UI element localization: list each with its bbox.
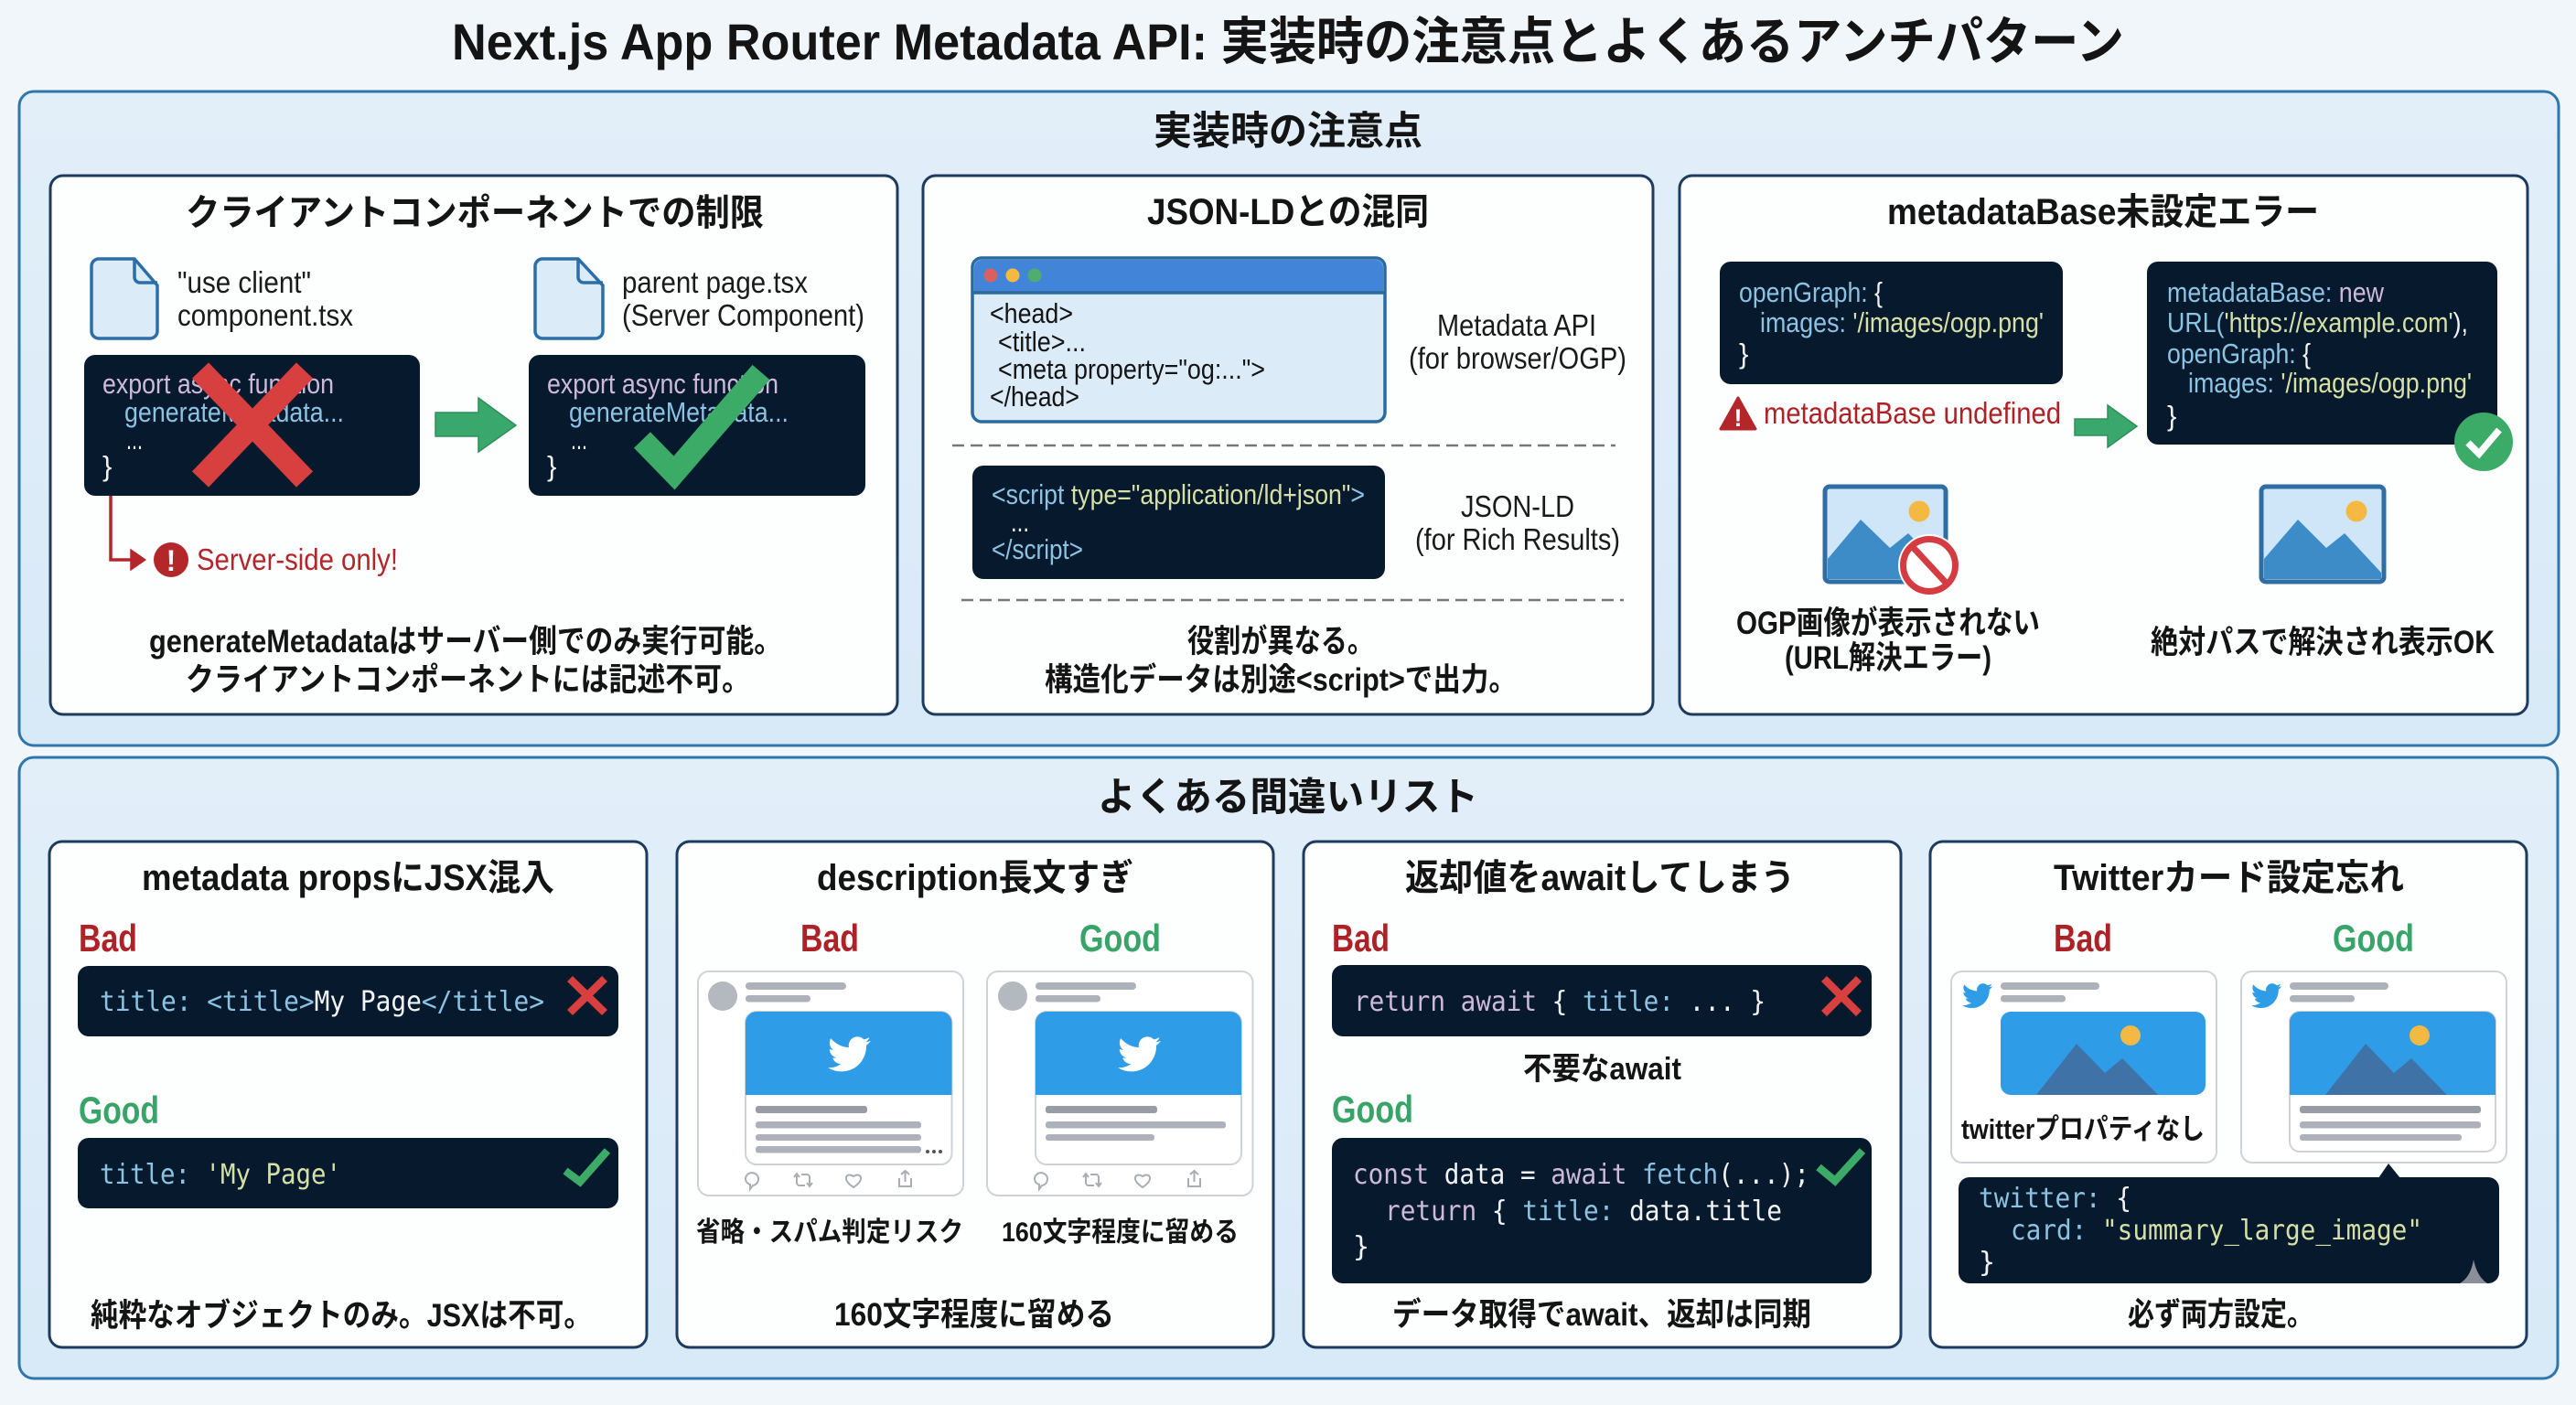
icon: warning: ! — [1734, 404, 1742, 432]
heading: description長文すぎ — [817, 858, 1133, 898]
title: Next.js App Router Metadata API: 実装時の注意点とよくあるアンチパターン — [452, 13, 2124, 70]
code block: with metadataBase — [2147, 262, 2497, 445]
code block: without metadataBase: openGraph: { — [1739, 276, 1883, 308]
label: Good: Good — [2333, 917, 2414, 960]
code block: server: generateMetadata... — [569, 396, 789, 428]
heading: Twitterカード設定忘れ — [2054, 858, 2404, 898]
icon: red cross — [570, 979, 605, 1013]
code block: client: export async function — [102, 368, 334, 400]
icon: broken OGP image — [1825, 487, 1960, 596]
code block: good: return { title: data.title — [1385, 1196, 1782, 1228]
label: Bad: Bad — [800, 917, 859, 960]
panel: 返却値をawaitしてしまう — [1304, 842, 1901, 1347]
file label: use client — [177, 265, 353, 332]
caption: success: 絶対パスで解決され表示OK — [2151, 625, 2495, 660]
file label: parent page — [622, 265, 864, 332]
code block: with metadataBase: openGraph: { — [2167, 338, 2311, 370]
code block: good: const data = await fetch(...); — [1353, 1159, 1809, 1191]
arrow: server-side connector — [111, 496, 144, 568]
panel: クライアントコンポーネントでの制限 — [50, 176, 897, 714]
code block: server — [529, 355, 865, 496]
icon: green check — [642, 372, 761, 473]
label: Bad: Bad — [1332, 917, 1390, 960]
code block: with metadataBase: metadataBase: new — [2167, 276, 2385, 308]
heading: metadataBase未設定エラー — [1887, 192, 2319, 232]
code block: JSON-LD script — [972, 466, 1385, 579]
code block: with metadataBase: images: '/images/ogp.png' — [2188, 367, 2472, 399]
panel: metadata propsにJSX混入 — [49, 842, 647, 1347]
caption: bad: 省略・スパム判定リスク — [696, 1217, 963, 1248]
code block: good — [1332, 1138, 1872, 1283]
code block: twitter config: card: "summary_large_image" — [2011, 1215, 2422, 1247]
icon: red cross — [200, 370, 305, 479]
panel: JSON-LDとの混同 — [923, 176, 1653, 714]
code block: client: ... — [126, 424, 143, 456]
label: Bad: Bad — [2054, 917, 2112, 960]
tweet mockup: truncated — [698, 971, 963, 1196]
label: JSON-LD — [1415, 489, 1620, 556]
panel: Twitterカード設定忘れ — [1930, 842, 2527, 1347]
browser window: </head> — [990, 381, 1079, 413]
code block: client: generateMetadata... — [124, 396, 344, 428]
label: Bad: Bad — [79, 917, 137, 960]
code block: bad — [78, 966, 618, 1036]
heading: metadata propsにJSX混入 — [142, 858, 554, 898]
label: Good: Good — [1079, 917, 1161, 960]
icon: green check — [565, 1151, 607, 1182]
icon: red cross — [1824, 979, 1859, 1014]
note text: 必ず両方設定。 — [2128, 1297, 2313, 1333]
label: Metadata API: (for browser/OGP) — [1409, 341, 1626, 375]
browser window: <title>... — [998, 326, 1086, 358]
code block: bad: title: <title>My Page</title> — [100, 986, 544, 1018]
icon: server file — [535, 259, 603, 338]
code block: client — [84, 355, 420, 496]
twitter card mockup: complete — [2241, 971, 2506, 1163]
note text — [149, 624, 782, 698]
browser window — [972, 258, 1385, 422]
note text: 構造化データは別途<script>で出力。 — [1045, 661, 1517, 698]
code block: twitter config: } — [1979, 1247, 1995, 1279]
icon: exclamation: ! — [166, 544, 176, 577]
callout: unnecessary await: 不要なawait — [1523, 1052, 1681, 1087]
browser window: <meta property="og:..."> — [998, 353, 1265, 385]
twitter card mockup: missing property — [1951, 971, 2216, 1163]
code block: bad: return await { title: ... } — [1354, 986, 1766, 1018]
browser window: <head> — [990, 297, 1073, 329]
code block: with metadataBase: URL('https://example.com'), — [2167, 306, 2468, 338]
panel: よくある間違いリスト section — [19, 757, 2558, 1378]
code block: bad — [1332, 965, 1872, 1036]
panel: metadataBase未設定エラー — [1680, 176, 2528, 714]
file label: use client: "use client" — [177, 265, 311, 299]
panel: 実装時の注意点 section — [19, 91, 2559, 745]
file label: parent page: (Server Component) — [622, 298, 864, 332]
note text: 純粋なオブジェクトのみ。JSXは不可。 — [91, 1297, 592, 1334]
heading: JSON-LDとの混同 — [1147, 192, 1429, 232]
label: JSON-LD: (for Rich Results) — [1415, 522, 1620, 556]
code block: twitter config — [1959, 1164, 2499, 1283]
code block: JSON-LD script: </script> — [992, 533, 1083, 565]
code block: without metadataBase: } — [1739, 338, 1748, 370]
callout: server-side only: Server-side only! — [197, 542, 398, 576]
code block: good: } — [1353, 1231, 1369, 1263]
heading: よくある間違いリスト: よくある間違いリスト — [1098, 776, 1478, 820]
note text: クライアントコンポーネントには記述不可。 — [186, 662, 750, 698]
error label: metadataBase undefined — [1764, 396, 2061, 430]
note text: generateMetadataはサーバー側でのみ実行可能。 — [149, 624, 782, 660]
label: Metadata API — [1409, 308, 1626, 375]
heading: 返却値をawaitしてしまう — [1405, 858, 1795, 898]
tweet mockup: concise — [987, 971, 1253, 1196]
arrow: client to server — [435, 398, 516, 452]
caption: good: 160文字程度に留める — [1002, 1217, 1239, 1248]
caption: failure: OGP画像が表示されない — [1736, 606, 2040, 641]
code block: JSON-LD script: <script type="application/ld+json"> — [992, 478, 1365, 510]
label: Good: Good — [1332, 1088, 1413, 1131]
code block: good: title: 'My Page' — [100, 1159, 341, 1191]
heading: 実装時の注意点: 実装時の注意点 — [1154, 110, 1422, 154]
icon: warning — [1721, 398, 1755, 432]
note text: 160文字程度に留める — [834, 1297, 1114, 1333]
caption: failure: (URL解決エラー) — [1785, 640, 1991, 676]
code block: JSON-LD script: ... — [1011, 506, 1029, 538]
code block: good — [78, 1138, 618, 1208]
file label: parent page: parent page.tsx — [622, 265, 808, 299]
icon: success badge — [2454, 413, 2513, 471]
icon: green check — [1819, 1151, 1862, 1181]
note text: データ取得でawait、返却は同期 — [1392, 1296, 1811, 1333]
code block: server: ... — [571, 424, 587, 456]
code block: without metadataBase: images: '/images/ogp.png' — [1760, 306, 2044, 338]
arrow: fix — [2075, 405, 2137, 447]
caption: failure — [1736, 606, 2040, 676]
code block: without metadataBase — [1720, 262, 2063, 384]
code block: client: } — [102, 450, 112, 482]
code block: with metadataBase: } — [2167, 400, 2176, 432]
note text — [1045, 624, 1517, 698]
file label: use client: component.tsx — [177, 298, 353, 332]
icon: resolved OGP image — [2261, 487, 2384, 582]
code block: twitter config: twitter: { — [1979, 1183, 2131, 1215]
code block: server: export async function — [547, 368, 778, 400]
note text: 役割が異なる。 — [1187, 624, 1374, 660]
panel: description長文すぎ — [677, 842, 1273, 1347]
icon: exclamation — [154, 542, 188, 577]
icon: client file — [91, 259, 157, 338]
code block: server: } — [547, 450, 556, 482]
twitter card mockup: missing property: twitterプロパティなし — [1961, 1113, 2205, 1145]
label: Metadata API: Metadata API — [1437, 308, 1596, 342]
heading: クライアントコンポーネントでの制限 — [186, 193, 764, 233]
label: Good: Good — [79, 1089, 159, 1132]
label: JSON-LD: JSON-LD — [1461, 489, 1574, 523]
